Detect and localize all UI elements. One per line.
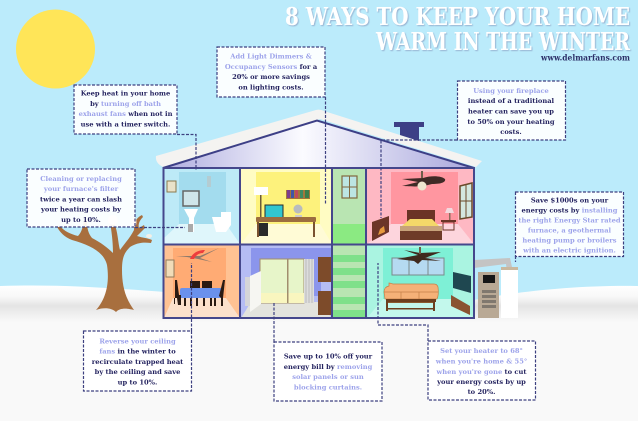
- title: [285, 2, 631, 56]
- callout: light dimmers: 20% or more savings: [232, 73, 310, 81]
- callout: ceiling fans: fans in the winter to: [99, 348, 176, 356]
- sofa: [384, 283, 438, 299]
- callout: energy star furnace: furnace, a geothermal: [528, 226, 612, 234]
- callout: curtains: Save up to 10% off your: [284, 352, 373, 360]
- callout: ceiling fans: [84, 331, 192, 391]
- bed: [407, 210, 435, 222]
- snowy ground: [0, 285, 638, 421]
- callout: curtains: solar panels or sun: [292, 373, 364, 381]
- callout: furnace filter: up to 10%.: [61, 216, 101, 224]
- callout: bath exhaust fans: by turning off bath: [90, 100, 161, 108]
- room: lounge: [367, 245, 474, 318]
- callout: energy star furnace: [516, 192, 624, 256]
- room: living with sliding door: [241, 245, 332, 318]
- radiator cabinet: [451, 295, 470, 315]
- ceiling fan: [402, 176, 445, 186]
- callout: fireplace: heater can save you up: [468, 108, 554, 116]
- television: [453, 272, 471, 293]
- connector lines: [135, 97, 516, 342]
- sun: [16, 10, 95, 88]
- callout: energy star furnace: the right Energy Star rated: [518, 216, 621, 224]
- callout: fireplace: instead of a traditional: [468, 97, 555, 105]
- callout: energy star furnace: with an electric ignition.: [522, 246, 616, 254]
- nightstand and lamp: [441, 220, 456, 222]
- room: stair landing: [333, 169, 366, 244]
- website url: www.delmarfans.com: [540, 52, 630, 62]
- room: bathroom: [164, 169, 240, 244]
- room: office: [241, 169, 332, 244]
- callout: heater temperature: your energy costs by up: [436, 378, 526, 386]
- tree: [57, 215, 152, 312]
- callout: furnace filter: Cleaning or replacing: [40, 175, 122, 183]
- callout: furnace filter: twice a year can slash: [40, 196, 122, 204]
- callout: light dimmers: [217, 47, 325, 97]
- callout: heater temperature: when you're gone to cut: [436, 368, 527, 376]
- callout: curtains: energy bill by removing: [284, 363, 373, 371]
- callout: ceiling fans: by the ceiling and save: [95, 368, 180, 376]
- window: [460, 183, 472, 219]
- callout: fireplace: to 50% on your heating: [467, 118, 555, 126]
- callout: curtains: blocking curtains.: [294, 384, 362, 392]
- fireplace: [372, 216, 389, 241]
- callout: curtains: [274, 342, 382, 401]
- callout: bath exhaust fans: use with a timer switch.: [81, 120, 170, 128]
- callout: bath exhaust fans: Keep heat in your home: [81, 90, 170, 98]
- callout: heater temperature: to 20%.: [468, 388, 495, 396]
- room: staircase: [333, 245, 366, 318]
- callout: bath exhaust fans: exhaust fans when not in: [79, 110, 173, 118]
- callout: ceiling fans: recirculate trapped heat: [92, 358, 184, 366]
- callout: ceiling fans: up to 10%.: [118, 378, 157, 386]
- ceiling fan: [397, 250, 441, 264]
- callout: furnace filter: your furnace's filter: [43, 185, 119, 193]
- callout: ceiling fans: Reverse your ceiling: [99, 338, 176, 346]
- furnace and water heater: [474, 258, 518, 318]
- callout: furnace filter: [27, 169, 135, 227]
- callout: heater temperature: Set your heater to 68°: [440, 347, 523, 355]
- callout: light dimmers: Occupancy Sensors for a: [225, 63, 318, 71]
- callout: heater temperature: when you're home & 55°: [435, 358, 527, 366]
- roof: [156, 110, 482, 168]
- house: [156, 110, 482, 318]
- room: bedroom: [367, 169, 474, 244]
- callout: heater temperature: [428, 341, 536, 400]
- callout: bath exhaust fans: [74, 85, 177, 134]
- callout: light dimmers: on lighting costs.: [238, 84, 304, 92]
- callout: fireplace: costs.: [500, 128, 522, 136]
- callout: energy star furnace: heating pump or broilers: [522, 236, 617, 244]
- chimney: [394, 122, 424, 142]
- room: dining: [164, 245, 240, 318]
- house frame: [164, 168, 474, 318]
- callout: light dimmers: Add Light Dimmers &: [229, 52, 312, 60]
- callout: energy star furnace: energy costs by installing: [522, 206, 618, 214]
- callout: fireplace: Using your fireplace: [473, 87, 549, 95]
- callout: energy star furnace: Save $1000s on your: [531, 196, 609, 204]
- callout: fireplace: [458, 81, 566, 140]
- callout: furnace filter: your heating costs by: [40, 206, 122, 214]
